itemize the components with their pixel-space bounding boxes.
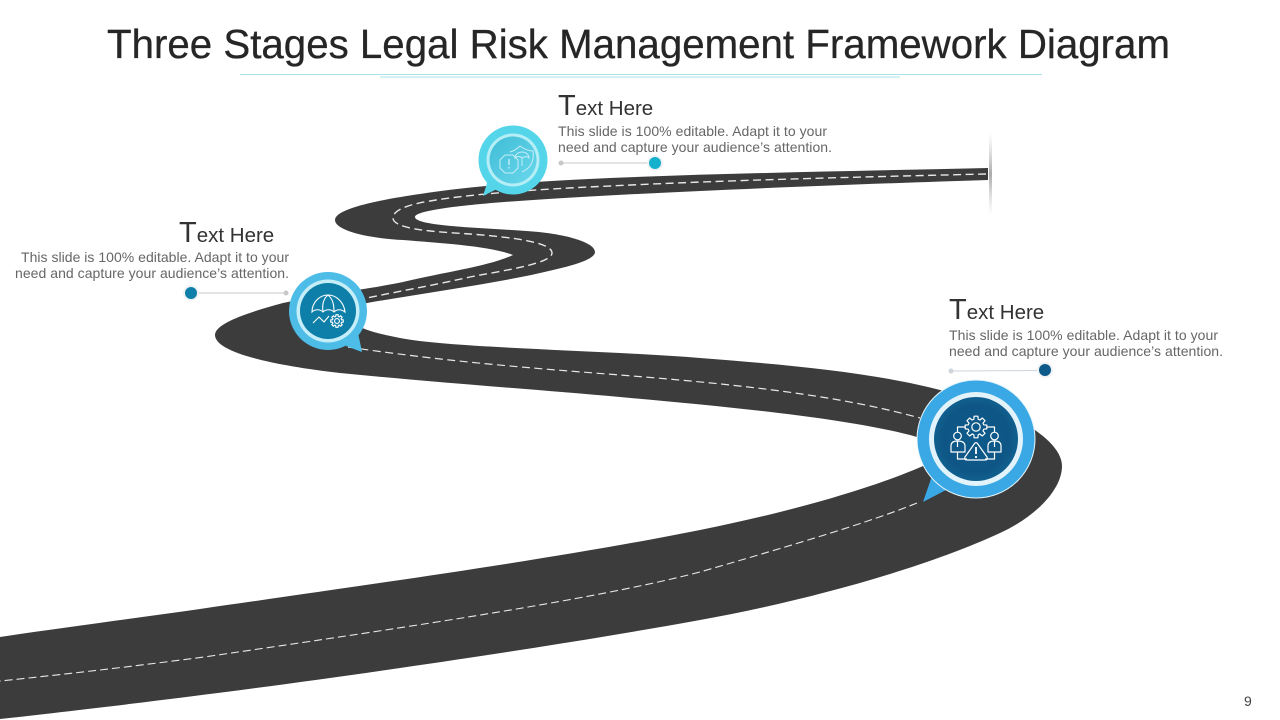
stage 2 text: need and capture your audience’s attention. — [15, 265, 289, 281]
stage 3 text: Text Here — [949, 294, 1044, 326]
stage 3 connector — [948, 362, 1053, 378]
stage 2 text: This slide is 100% editable. Adapt it to your — [21, 249, 289, 265]
icon: umbrella, trend and gear — [312, 295, 345, 327]
stage 1 text: This slide is 100% editable. Adapt it to your — [558, 123, 827, 139]
stage 2 text: Text Here — [179, 217, 274, 249]
road end marker — [989, 133, 992, 215]
stage 3 text: This slide is 100% editable. Adapt it to your — [949, 327, 1218, 343]
stage 3 text — [949, 294, 1223, 359]
page number: 9 — [1244, 693, 1252, 709]
stage 1 text: need and capture your audience’s attention. — [558, 139, 832, 155]
stage 3 pin — [917, 380, 1035, 502]
stage 2 connector — [183, 285, 288, 301]
stage 1 pin — [478, 126, 548, 196]
title: Three Stages Legal Risk Management Framework Diagram — [107, 21, 1170, 67]
stage 1 text — [558, 90, 832, 155]
stage 2 text — [15, 217, 289, 281]
stage 3 text: need and capture your audience’s attention. — [949, 343, 1223, 359]
icon: shield and warning — [500, 146, 533, 173]
icon: people, gear and warning — [951, 416, 1001, 460]
stage 1 connector — [558, 155, 663, 171]
road — [0, 168, 1062, 719]
stage 1 text: Text Here — [558, 90, 653, 122]
stage 2 pin — [289, 272, 367, 352]
